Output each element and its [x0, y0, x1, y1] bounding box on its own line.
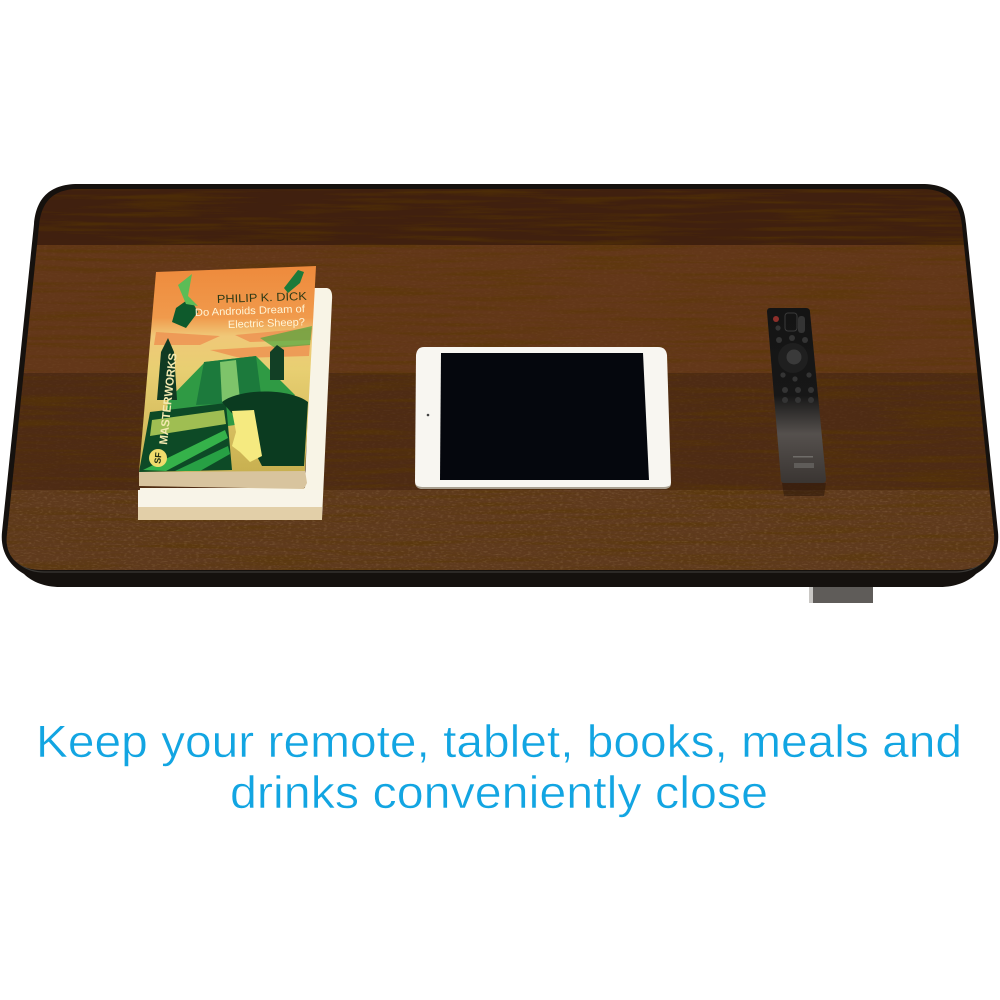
book title	[195, 303, 305, 331]
book cover art	[139, 266, 316, 472]
rocket icon	[284, 270, 304, 293]
smoke	[172, 298, 198, 328]
tabletop	[0, 184, 1000, 587]
lower book	[138, 288, 332, 520]
book title: Do Androids Dream of	[195, 303, 305, 319]
tabletop black edge	[2, 184, 998, 587]
upper book: Philip K. Dick	[139, 266, 316, 489]
tablet camera	[427, 414, 429, 416]
book series: MASTERWORKS	[158, 352, 180, 445]
dashboard	[139, 403, 232, 472]
towers	[157, 338, 177, 400]
building	[165, 356, 295, 435]
woman's hair	[222, 392, 308, 466]
caption: Keep your remote, tablet, books, meals and	[36, 716, 962, 767]
book title: Electric Sheep?	[228, 316, 305, 331]
woman's face	[232, 410, 262, 462]
remote shadow	[782, 483, 826, 496]
tablet body	[415, 347, 671, 489]
table leg bracket	[809, 585, 873, 603]
SF badge	[149, 449, 167, 467]
book pages	[139, 470, 307, 489]
remote body	[767, 308, 826, 483]
SF badge: SF	[152, 451, 164, 464]
remote buttons	[773, 313, 814, 468]
caption: drinks conveniently close	[230, 767, 768, 818]
infographic	[2, 184, 998, 818]
remote control	[767, 308, 826, 496]
tablet screen	[440, 353, 649, 480]
caption	[36, 716, 962, 818]
tablet	[415, 347, 671, 489]
wood surface	[0, 185, 1000, 575]
book author: PHILIP K. DICK	[217, 291, 307, 306]
